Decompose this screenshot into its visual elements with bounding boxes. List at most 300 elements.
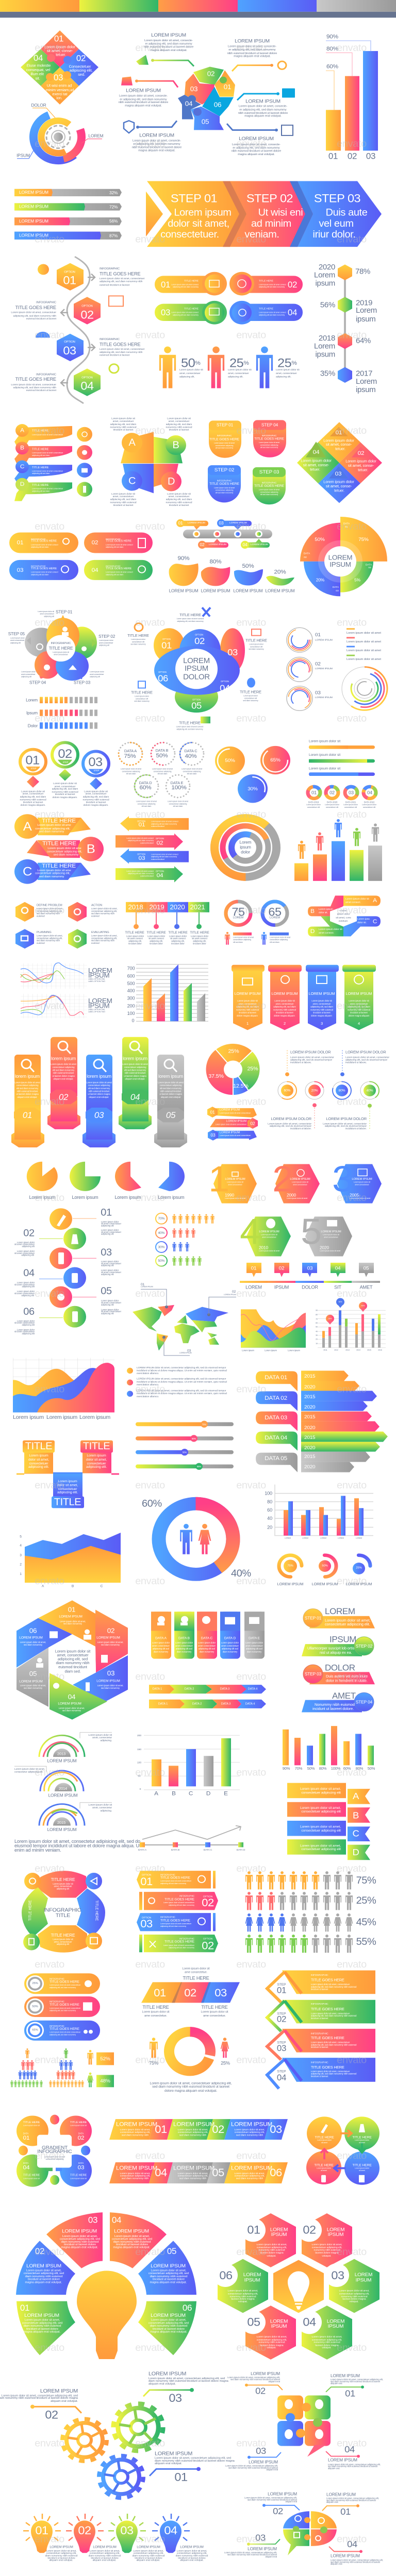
- text: envato: [35, 234, 64, 245]
- side labels: consectetuer elit: [244, 698, 257, 699]
- text: envato: [35, 617, 64, 629]
- panel: four infographic pills with icons: adipiscing elit sed diam: [31, 573, 49, 575]
- panel: square puzzle speech bubble: sed diam nonummy nibh euismod tincidunt ut laoreet: [331, 2380, 381, 2382]
- panel: four infographic pills with icons: INFOGRAPHIC: [106, 537, 121, 540]
- panel: hexagon flower with bulb: nonummy nibh euismod: [258, 2341, 285, 2344]
- text: envato: [236, 1480, 266, 1491]
- chart: twin line grids: LOREM: [88, 997, 112, 1005]
- panel: four lightbulbs: tincidunt ut laoreet dolore: [47, 2556, 75, 2560]
- panel: step 01-03 chevrons: vel eum: [319, 218, 354, 229]
- callout texts: LOREM IPSUM: [239, 136, 274, 142]
- panel: TITLE blocks: consectetuer: [87, 1462, 106, 1465]
- text: envato: [35, 905, 64, 916]
- text: envato: [135, 2534, 165, 2545]
- panel: round speech puzzle: LOREM IPSUM: [326, 2492, 356, 2497]
- panel: four circle cycle: Lorem ipsum dolor: [317, 2139, 332, 2141]
- diamond texts: 03: [54, 73, 63, 82]
- panel: DATA 01-05 stepped arrows: DATA 02: [265, 1395, 287, 1401]
- panel: step chevron list 01-04: adipiscing elit, sed diam nonummy nibh euismod: [311, 2014, 357, 2017]
- panel: circle chain 01-06: adipiscing elit: [21, 1294, 35, 1296]
- chart: layered area: [241, 1309, 306, 1351]
- panel: four lightbulbs: Lorem ipsum dolor sit amet,: [46, 2549, 76, 2552]
- panel: hexagon problem grid: ACTION: [91, 904, 102, 907]
- panel: LOREM IPSUM DOLOR AMET ribbons: STEP 04: [356, 1700, 373, 1704]
- panel: 01-03 parallelogram: Lorem ipsum dolor sit: [142, 2011, 170, 2013]
- panel: pins 01-03: 01: [25, 753, 40, 767]
- option texts: TITLE GOES HERE: [100, 272, 141, 276]
- panel: pins 01-03: STEP: [94, 769, 100, 772]
- panel: circular infographic title: adipiscing elit: [57, 1943, 70, 1945]
- panel: big lightbulb fan 01-06: consectetuer adipiscing elit, sed: [22, 2322, 62, 2325]
- panel: parallelogram band 04-06: 06: [270, 2166, 282, 2179]
- panel: hexagon problem grid: EVALUATING: [91, 931, 109, 934]
- panel: step 01-03 chevrons: dolor sit amet,: [168, 218, 229, 229]
- panel: dotted pin notes and mini gauges: 40%: [367, 1089, 373, 1092]
- panel: magnifier columns 01-05: consectetuer adipiscing: [88, 1084, 110, 1087]
- panel: step chevron list 01-04: TITLE GOES HERE: [311, 2006, 344, 2011]
- panel: mini spiral gauges: LOREM IPSUM: [312, 1582, 338, 1586]
- panel: four infographic pills with icons: 03: [17, 567, 23, 573]
- panel: round speech puzzle: 03: [255, 2533, 266, 2543]
- panel: bullet paragraphs: incididunt ut labore et dolore magna aliqua. Ut enim ad minim veniam, quis nostrud: [137, 1369, 227, 1372]
- panel: arrow banners 01-04: euismod tincidunt: [151, 858, 164, 860]
- panel: five tags and colour band: 05: [364, 1265, 369, 1271]
- chart: eight narrow bars: 70%: [295, 1766, 303, 1770]
- chart: filled cups: [169, 555, 295, 593]
- panel: progress bars: 87%: [109, 234, 118, 239]
- panel: ABCD stacked list: TITLE HERE: [32, 466, 49, 469]
- chart: person rows: [245, 1871, 376, 1953]
- chart: bars A-E: [137, 1734, 240, 1797]
- panel: magnifier columns 01-05: nibh euismod tincidunt: [160, 1090, 182, 1092]
- panel: small ribbons 01-03: Lorem ipsum dolor sit amet consectetuer: [220, 1134, 251, 1137]
- chart: big concentric donut: dolor: [241, 850, 250, 854]
- panel: gradient infographic four blobs: 04: [23, 2165, 30, 2171]
- panel: hexagon problem grid: euismod: [37, 941, 45, 944]
- panel: year timeline 2018-2021: adipiscing elit,: [171, 940, 185, 942]
- panel: banner flags A-D: C: [353, 1828, 359, 1839]
- chart: stacked bars with pins: 2016: [378, 1349, 382, 1351]
- panel: step chevron list 01-04: tincidunt ut laoreet: [311, 2075, 328, 2077]
- panel: data tabs A-E: diam nonummy: [247, 1650, 262, 1653]
- panel: four infographic pills with icons: INFOGRAPHIC: [106, 565, 121, 567]
- chart: filled cups: 50%: [242, 563, 254, 569]
- panel: four circle cycle: [306, 2116, 380, 2185]
- text: envato: [236, 234, 266, 245]
- panel: ABCD four quadrant: tincidunt ut laoreet: [113, 504, 134, 507]
- panel: four-part diamond with triangles: Lorem ipsum dolor: [323, 479, 354, 484]
- panel: step shields: Lorem ipsum dolor sit amet: [214, 487, 235, 489]
- panel: four-part diamond with triangles: Lorem ipsum dolor: [301, 458, 332, 463]
- panel: four lightbulbs: diam nonummy nibh euismod: [45, 2554, 78, 2557]
- panel: magnifier columns 01-05: aliquam erat volutpat: [161, 1096, 181, 1098]
- diamond texts: sed.: [78, 72, 85, 76]
- panel: four infographic pills with icons: adipiscing elit sed diam: [31, 546, 49, 548]
- panel: five step speech blobs: Lorem ipsum dolor: [90, 671, 105, 673]
- panel: dotted pin notes and mini gauges: 60%: [284, 1089, 291, 1092]
- panel: bullet paragraphs: exercitation ullamco.: [137, 1395, 159, 1398]
- panel: four infographic pills with icons: adipiscing elit sed diam: [106, 546, 124, 548]
- panel: four lightbulbs: aliquam erat volutpat.: [137, 2558, 160, 2562]
- panel: step chevron list 01-04: STEP: [277, 2012, 286, 2015]
- panel: option bands 01-04: adipiscing elit sed diam nonummy: [160, 1883, 186, 1885]
- text: envato: [236, 1671, 266, 1683]
- panel: arrow banners 01-04: Lorem ipsum dolor sit amet consect: [126, 870, 154, 872]
- panel: big lightbulb fan 01-06: magna aliquam erat volutpat.: [113, 2246, 151, 2249]
- panel: round speech puzzle: LOREM IPSUM: [268, 2492, 297, 2496]
- panel: ABCD four quadrant: Lorem ipsum dolor sit: [167, 493, 191, 496]
- panel: circle chain 01-06: Lorem ipsum dolor: [101, 1269, 119, 1272]
- panel: arrow banners 01-04: Lorem ipsum dolor sit amet consect: [151, 821, 178, 823]
- chart: slanted bars 0-700: 400: [127, 988, 135, 993]
- chart: stacked bars with pins: 2011: [323, 1349, 327, 1351]
- text: envato: [135, 1192, 165, 1204]
- panel: pin timeline tube: 04: [243, 543, 248, 547]
- panel: slim progress bars and mini donuts: consectetuer elit: [363, 806, 375, 808]
- panel: people percentages: amet, consectetuer: [228, 371, 249, 375]
- panel: LOREM IPSUM parallelogram band 01-03: LOREM IPSUM: [116, 2122, 157, 2127]
- panel: progress bars: LOREM IPSUM: [19, 219, 48, 224]
- head pieces: 05: [202, 118, 209, 126]
- panel: big lightbulb fan 01-06: consectetuer adipiscing elit, sed: [60, 2238, 100, 2241]
- panel: five step speech blobs: amet consectetuer: [40, 613, 55, 615]
- panel: big lightbulb fan 01-06: diam nonummy nibh euismod: [25, 2275, 62, 2278]
- text: envato: [35, 1575, 64, 1587]
- legend: Lorem ipsum dolor sit amet: [346, 632, 381, 635]
- chart: trend arrow line: DATA B: [171, 1849, 179, 1852]
- chart: world map: LOREM IPSUM: [141, 1286, 153, 1288]
- panel: circle chain 01-06: sit amet consectetuer: [14, 1283, 35, 1285]
- panel: ABCD stacked list: TITLE HERE: [32, 429, 49, 432]
- panel: ring stats with legend: LOREM IPSUM: [315, 696, 333, 699]
- panel: step shields: INFOGRAPHIC: [217, 479, 232, 482]
- panel: ABC ribbons: [14, 814, 104, 884]
- panel: slim progress bars and mini donuts: Lorem ipsum dolor: [343, 804, 358, 806]
- mini donuts: [305, 784, 378, 801]
- text: envato: [135, 809, 165, 820]
- panel: TITLE blocks: dolor sit amet,: [57, 1483, 78, 1487]
- chart: bars A-E: A: [154, 1791, 158, 1797]
- chart: filled cups: LOREM IPSUM: [266, 588, 295, 593]
- panel: big lightbulb fan 01-06: LOREM IPSUM: [26, 2263, 61, 2268]
- chart: grid area with three layers: Lorem ipsum: [79, 1414, 110, 1420]
- panel: hexagon flower with bulb: IPSUM: [328, 2232, 343, 2237]
- panel: gauge pills with icons: [24, 1973, 100, 2041]
- panel: circle chain 01-06: sit amet consectetuer: [14, 1321, 35, 1324]
- text: envato: [35, 2247, 64, 2258]
- panel: data tabs A-E: DATA D: [224, 1636, 236, 1640]
- panel: ABCD hex links: amet consect.: [345, 901, 361, 904]
- panel: option bands 01-04: INFOGRAPHIC: [160, 1916, 175, 1918]
- panel: ABCD stacked list: adipiscing elit sed diam: [32, 472, 50, 474]
- chart: paired bars: LOREM: [338, 1537, 344, 1539]
- text: envato: [135, 330, 165, 341]
- panel: gradient infographic four blobs: Lorem ipsum dolor sit: [70, 2125, 87, 2126]
- panel: step shields: TITLE GOES HERE: [254, 437, 285, 440]
- panel: year timeline 2018-2021: tincidunt dolor: [193, 942, 206, 944]
- panel: chevron process bars: DATA 1: [153, 1688, 162, 1691]
- panel: year timeline 2018-2021: tincidunt dolor: [171, 942, 185, 944]
- side labels: TITLE HERE: [179, 721, 201, 725]
- chart: dotted percentage circles: Lorem ipsum dolor sit amet: [182, 768, 202, 770]
- panel: magnifier columns 01-05: Lorem ipsum dolor sit amet: [14, 1081, 41, 1083]
- panel: magnifier columns 01-05: elit sed diam nonummy: [16, 1087, 39, 1089]
- panel: gauge pills with icons: adipiscing elit, sed diam nonummy: [50, 1987, 76, 1989]
- panel: ABCD four quadrant: B: [173, 439, 179, 451]
- panel: four lightbulbs: [23, 2514, 208, 2562]
- panel: arrow banners 01-04: 03: [139, 855, 145, 861]
- panel: LOREM IPSUM parallelogram band 01-03: sed diam nonummy nibh: [179, 2133, 207, 2137]
- panel: TITLE blocks: dolor sit amet,: [28, 1458, 49, 1461]
- panel: ABCD stacked list: A: [20, 428, 24, 433]
- panel: hexagon flower with bulb: IPSUM: [244, 2277, 260, 2283]
- panel: DATA 01-05 stepped arrows: [256, 1371, 388, 1472]
- option texts: Lorem ipsum dolor sit amet, consectetuer: [11, 383, 56, 386]
- panel: four pill labels: adipiscing elit sed diam nonummy: [259, 286, 285, 288]
- option texts: INFOGRAPHIC: [36, 374, 56, 377]
- panel: banner flags A-D: B: [353, 1810, 359, 1820]
- panel: progress bars: LOREM IPSUM: [19, 190, 48, 195]
- panel: big lightbulb fan 01-06: diam nonummy nibh euismod: [150, 2275, 187, 2278]
- panel: circle chain 01-06: Lorem ipsum dolor: [17, 1241, 35, 1243]
- panel: four lightbulbs: diam nonummy nibh euismod: [89, 2554, 121, 2557]
- panel: option bands 01-04: 01: [140, 1875, 153, 1888]
- panel: gauge pills with icons: TITLE GOES HERE: [50, 2003, 80, 2007]
- panel: hexagon problem grid: consectetuer adipiscing elit,: [37, 910, 62, 912]
- panel: big hexagon 01-06: sed diam nonummy: [101, 1686, 120, 1689]
- panel: four infographic pills with icons: [9, 533, 153, 580]
- panel: data tabs A-E: adipiscing elit sed: [199, 1647, 216, 1650]
- bar chart: 01 02 03: 80%: [326, 46, 338, 52]
- panel: five tags and colour band: 01: [251, 1265, 256, 1271]
- panel: ABCD four quadrant: adipiscing elit, sed diam: [110, 498, 136, 501]
- panel: chevron process bars: DATA 2: [185, 1688, 194, 1691]
- panel: hexagon flower with bulb: IPSUM: [328, 2324, 343, 2329]
- chart: 75 and 65 donuts with people: LOREM: [270, 916, 280, 919]
- chart: world map: 03: [187, 1349, 191, 1352]
- chart: paired bars: 100: [265, 1491, 272, 1496]
- panel: step chevron list 01-04: 02: [277, 2014, 286, 2024]
- panel: four-part diamond with triangles: tetuer.: [310, 467, 320, 471]
- panel: numbered hexes 4-5: 4: [240, 1212, 260, 1252]
- panel: banner flags A-D: Lorem ipsum dolor sit amet,: [300, 1825, 341, 1828]
- panel: step shields: elit sed diam nonummy: [260, 447, 278, 449]
- panel: progress bars: 72%: [109, 205, 118, 209]
- diamond texts: illum elit: [30, 71, 44, 76]
- text: envato: [236, 1288, 266, 1299]
- text: envato: [35, 2150, 64, 2161]
- panel: big hexagon 01-06: sed diam nonummy: [101, 1643, 120, 1646]
- panel: four tall tags: nonummy nibh euismod: [348, 1008, 371, 1011]
- diamond texts: 02: [76, 54, 86, 63]
- panel: ABCD stacked list: Lorem ipsum dolor sit amet consectetuer: [32, 452, 63, 454]
- icon: box: [282, 125, 293, 135]
- chart: paired bars: LOREM: [285, 1537, 291, 1539]
- panel: 01-03 parallelogram: ame consectetue.: [203, 2014, 226, 2018]
- panel: big hexagon 01-06: 04: [68, 1693, 75, 1700]
- text: envato: [337, 1096, 367, 1107]
- panel: DATA 01-05 stepped arrows: 2020: [304, 1404, 316, 1410]
- chart: concentric rings: [338, 663, 391, 714]
- chart: grid area with three layers: [13, 1358, 114, 1420]
- panel: 01-03 parallelogram: 01: [154, 1987, 166, 1999]
- panel: big lightbulb fan 01-06: LOREM IPSUM: [24, 2313, 59, 2318]
- panel: big lightbulb fan 01-06: Lorem ipsum dolor sit amet,: [26, 2269, 62, 2272]
- chart: bar meters: [26, 697, 97, 729]
- paragraph: Lorem ipsum dolor sit amet, consectetur adipisicing elit, sed do: [14, 1839, 140, 1844]
- text: envato: [236, 1959, 266, 1970]
- panel: numbered hexes 1-3: 1990: [225, 1193, 235, 1197]
- panel: ABCD four quadrant: Lorem ipsum dolor sit: [111, 493, 136, 496]
- panel: big hexagon 01-06: LOREM IPSUM: [58, 1702, 81, 1705]
- panel: hexagon flower with bulb: volutpat.: [267, 2255, 276, 2257]
- panel: circle chain 01-06: sit amet consectetuer: [101, 1230, 122, 1233]
- panel: big lightbulb fan 01-06: consectetuer adipiscing elit, sed: [148, 2322, 189, 2325]
- chart: paired bars: LOREM: [320, 1537, 326, 1539]
- panel: parallelogram band 04-06: sed diam nonummy nibh: [179, 2177, 207, 2180]
- text: envato: [337, 43, 367, 54]
- gear 03: [113, 2403, 163, 2451]
- side labels: Lorem ipsum dolor sit amet consect: [176, 726, 203, 728]
- panel: mini spiral gauges: 25%: [356, 1567, 362, 1569]
- panel: small ribbons 01-03: Lorem ipsum dolor sit amet consectetuer: [220, 1112, 251, 1114]
- panel: round speech puzzle: aliquam erat: [331, 2563, 343, 2565]
- option texts: adipiscing elit, sed diam nonummy nibh: [13, 386, 56, 389]
- panel: four tall tags: dolore magna aliquam: [237, 1014, 258, 1016]
- text: envato: [236, 905, 266, 916]
- panel: pins 01-03: Lorem ipsum dolor sit: [84, 790, 108, 793]
- panel: gradient infographic four blobs: 01: [23, 2135, 29, 2141]
- text: envato: [35, 1192, 64, 1204]
- panel: people percentages: Lorem ipsum dolor sit: [228, 368, 252, 371]
- panel: TITLE blocks: TITLE: [83, 1440, 110, 1452]
- panel: LOREM IPSUM parallelogram band 01-03: Lorem ipsum dolor sit amet,: [120, 2128, 150, 2131]
- panel: circle chain 01-06: sit amet consectetuer: [101, 1301, 122, 1304]
- panel: four lightbulbs: LOREM IPSUM: [50, 2545, 73, 2549]
- panel: ABCD hex links: Lorem ipsum dolor sit: [345, 897, 369, 901]
- chart: slider bars: 60%: [192, 1437, 196, 1439]
- panel: 01-03 parallelogram: Lorem ipsum dolor sit: [183, 1968, 210, 1971]
- chart: radial quadrant pie: 5%: [354, 578, 360, 582]
- gear callouts: aliquam erat volutpat.: [155, 2462, 182, 2465]
- panel: four circle cycle: sit amet: [359, 2142, 365, 2144]
- panel: rainbow arches 2013-2015: adipiscing.: [101, 1739, 112, 1742]
- panel: four infographic pills with icons: TITLE GOES HERE: [31, 540, 57, 543]
- panel: hexagon flower with bulb: Lorem ipsum dolor sit amet,: [228, 2289, 258, 2292]
- panel: 01-03 parallelogram: TITLE HERE: [201, 2005, 228, 2010]
- callout texts: nibh euismod tincidunt ut laoreet dolore: [238, 112, 288, 115]
- panel: four tall tags: LOREM IPSUM: [235, 991, 260, 995]
- panel: four circle cycle: TITLE HERE: [315, 2136, 334, 2139]
- diamond texts: exerci tat: [53, 92, 68, 96]
- panel: five tags and colour band: SIT: [334, 1285, 342, 1290]
- chart: 75 and 65 donuts with people: [225, 902, 290, 945]
- chart: dotted percentage circles: 60%: [140, 785, 151, 791]
- panel: four tall tags: Lorem ipsum dolor sit: [274, 999, 295, 1002]
- panel: people percentages: 25%: [277, 356, 297, 370]
- panel: hexagon flower with bulb: Lorem ipsum dolor sit amet,: [312, 2335, 342, 2338]
- panel: numbered hexes 4-5: 2020: [320, 1245, 329, 1250]
- chart: blue and orange area: 2: [20, 1563, 22, 1566]
- panel: magnifier columns 01-05: aliquam erat volutpat: [17, 1096, 37, 1098]
- chart: segmented pie: 25%: [248, 1066, 258, 1072]
- panel: circular infographic title: TITLE HERE: [51, 1933, 75, 1937]
- panel: ABCD four quadrant: amet, consectetuer: [113, 420, 134, 423]
- panel: option bands 01-04: 02: [202, 1896, 214, 1909]
- chart: eight narrow bars: 50%: [307, 1766, 315, 1770]
- panel: four infographic pills with icons: TITLE GOES HERE: [106, 540, 131, 543]
- panel: pins 01-03: Lorem ipsum dolor sit: [53, 782, 77, 785]
- panel: vertical hexagon timeline: ipsum: [356, 315, 376, 324]
- panel: small ribbons 01-03: LOREM IPSUM: [220, 1109, 240, 1112]
- panel: arrow banners 01-04: adipiscing elit sed diam nonummy: [151, 823, 177, 825]
- panel: magnifier columns 01-05: nibh euismod tincidunt: [125, 1072, 146, 1074]
- panel: step shields: STEP 01: [217, 423, 234, 427]
- chart: people rows with rings: 50%: [158, 1259, 165, 1263]
- panel: step shields: [208, 420, 286, 504]
- panel: data tabs A-E: adipiscing elit sed: [176, 1647, 193, 1650]
- panel: four tall tags: adipiscing elit, sed diam: [310, 1005, 333, 1008]
- bar chart: 01 02 03: 01: [328, 151, 338, 161]
- callout texts: nibh euismod tincidunt ut laoreet dolore: [232, 149, 281, 152]
- panel: ABCD four quadrant: tincidunt ut laoreet: [169, 428, 189, 431]
- chart: 60/40 gender donut: 40%: [231, 1568, 251, 1579]
- text: envato: [135, 1384, 165, 1395]
- panel: four tall tags: amet, consectetuer: [239, 1003, 257, 1005]
- panel: data tabs A-E: DATA A: [155, 1636, 167, 1640]
- panel: hexagon flower with bulb: laoreet dolore magna: [260, 2251, 284, 2255]
- octagon badges: 03: [94, 1110, 104, 1120]
- panel: arrow banners 01-04: euismod tincidunt: [151, 825, 164, 827]
- panel: circle chain 01-06: Lorem ipsum dolor: [17, 1290, 35, 1293]
- panel: organic blob 01-06: OPTION: [158, 671, 167, 673]
- panel: hexagon problem grid: sed diam nonummy nibh: [37, 912, 60, 914]
- chart: trend arrow line: DATA D: [237, 1849, 245, 1852]
- text: envato: [135, 426, 165, 436]
- chart: stacked bars with pins: 30: [316, 1334, 318, 1336]
- panel: dotted pin notes and mini gauges: 20%: [311, 1089, 318, 1092]
- panel: numbered hexes 4-5: 5: [301, 1212, 321, 1252]
- panel: arrow banners 01-04: adipiscing elit sed diam nonummy: [151, 856, 177, 858]
- text: envato: [236, 1767, 266, 1778]
- panel: hexagon flower with bulb: LOREM: [355, 2272, 372, 2277]
- chart: dotted percentage circles: elit sed diam: [126, 773, 136, 775]
- panel: ABCD four quadrant: [110, 417, 192, 507]
- gear callouts: Lorem ipsum dolor sit amet, consectetuer adipiscing elit, sed: [2, 2394, 78, 2397]
- panel: five step speech blobs: STEP 05: [8, 632, 25, 636]
- panel: rainbow arches 2013-2015: 2013: [57, 1751, 65, 1756]
- panel: big lightbulb fan 01-06: tincidunt ut laoreet dolore: [153, 2328, 185, 2331]
- panel: slim progress bars and mini donuts: consectetuer elit: [344, 806, 357, 808]
- panel: five step speech blobs: STEP 03: [74, 681, 91, 685]
- panel: year timeline 2018-2021: adipiscing elit,: [128, 940, 142, 942]
- panel: four lightbulbs: Lorem ipsum dolor sit amet,: [134, 2549, 163, 2552]
- panel: ring stats with legend: 03: [315, 690, 321, 696]
- text: envato: [135, 1959, 165, 1970]
- text: envato: [135, 2247, 165, 2258]
- panel: hexagon problem grid: consectetuer adipiscing elit,: [91, 910, 117, 912]
- panel: puzzle diamond 01-04: [21, 30, 98, 105]
- text: envato: [236, 809, 266, 820]
- panel: data tabs A-E: diam nonummy: [200, 1650, 214, 1653]
- panel: four circle cycle: TITLE HERE: [352, 2163, 372, 2167]
- panel: pins 01-03: adipiscing elit, sed diam: [52, 787, 78, 790]
- side labels: consectetuer elit: [136, 698, 148, 700]
- text: envato: [337, 713, 367, 724]
- panel: square puzzle speech bubble: sed diam nonummy nibh euismod tincidunt ut laoreet: [230, 2378, 280, 2380]
- panel: magnifier columns 01-05: aliquam erat volutpat: [89, 1096, 109, 1098]
- panel: ABCD four quadrant: adipiscing elit, sed diam: [166, 423, 192, 426]
